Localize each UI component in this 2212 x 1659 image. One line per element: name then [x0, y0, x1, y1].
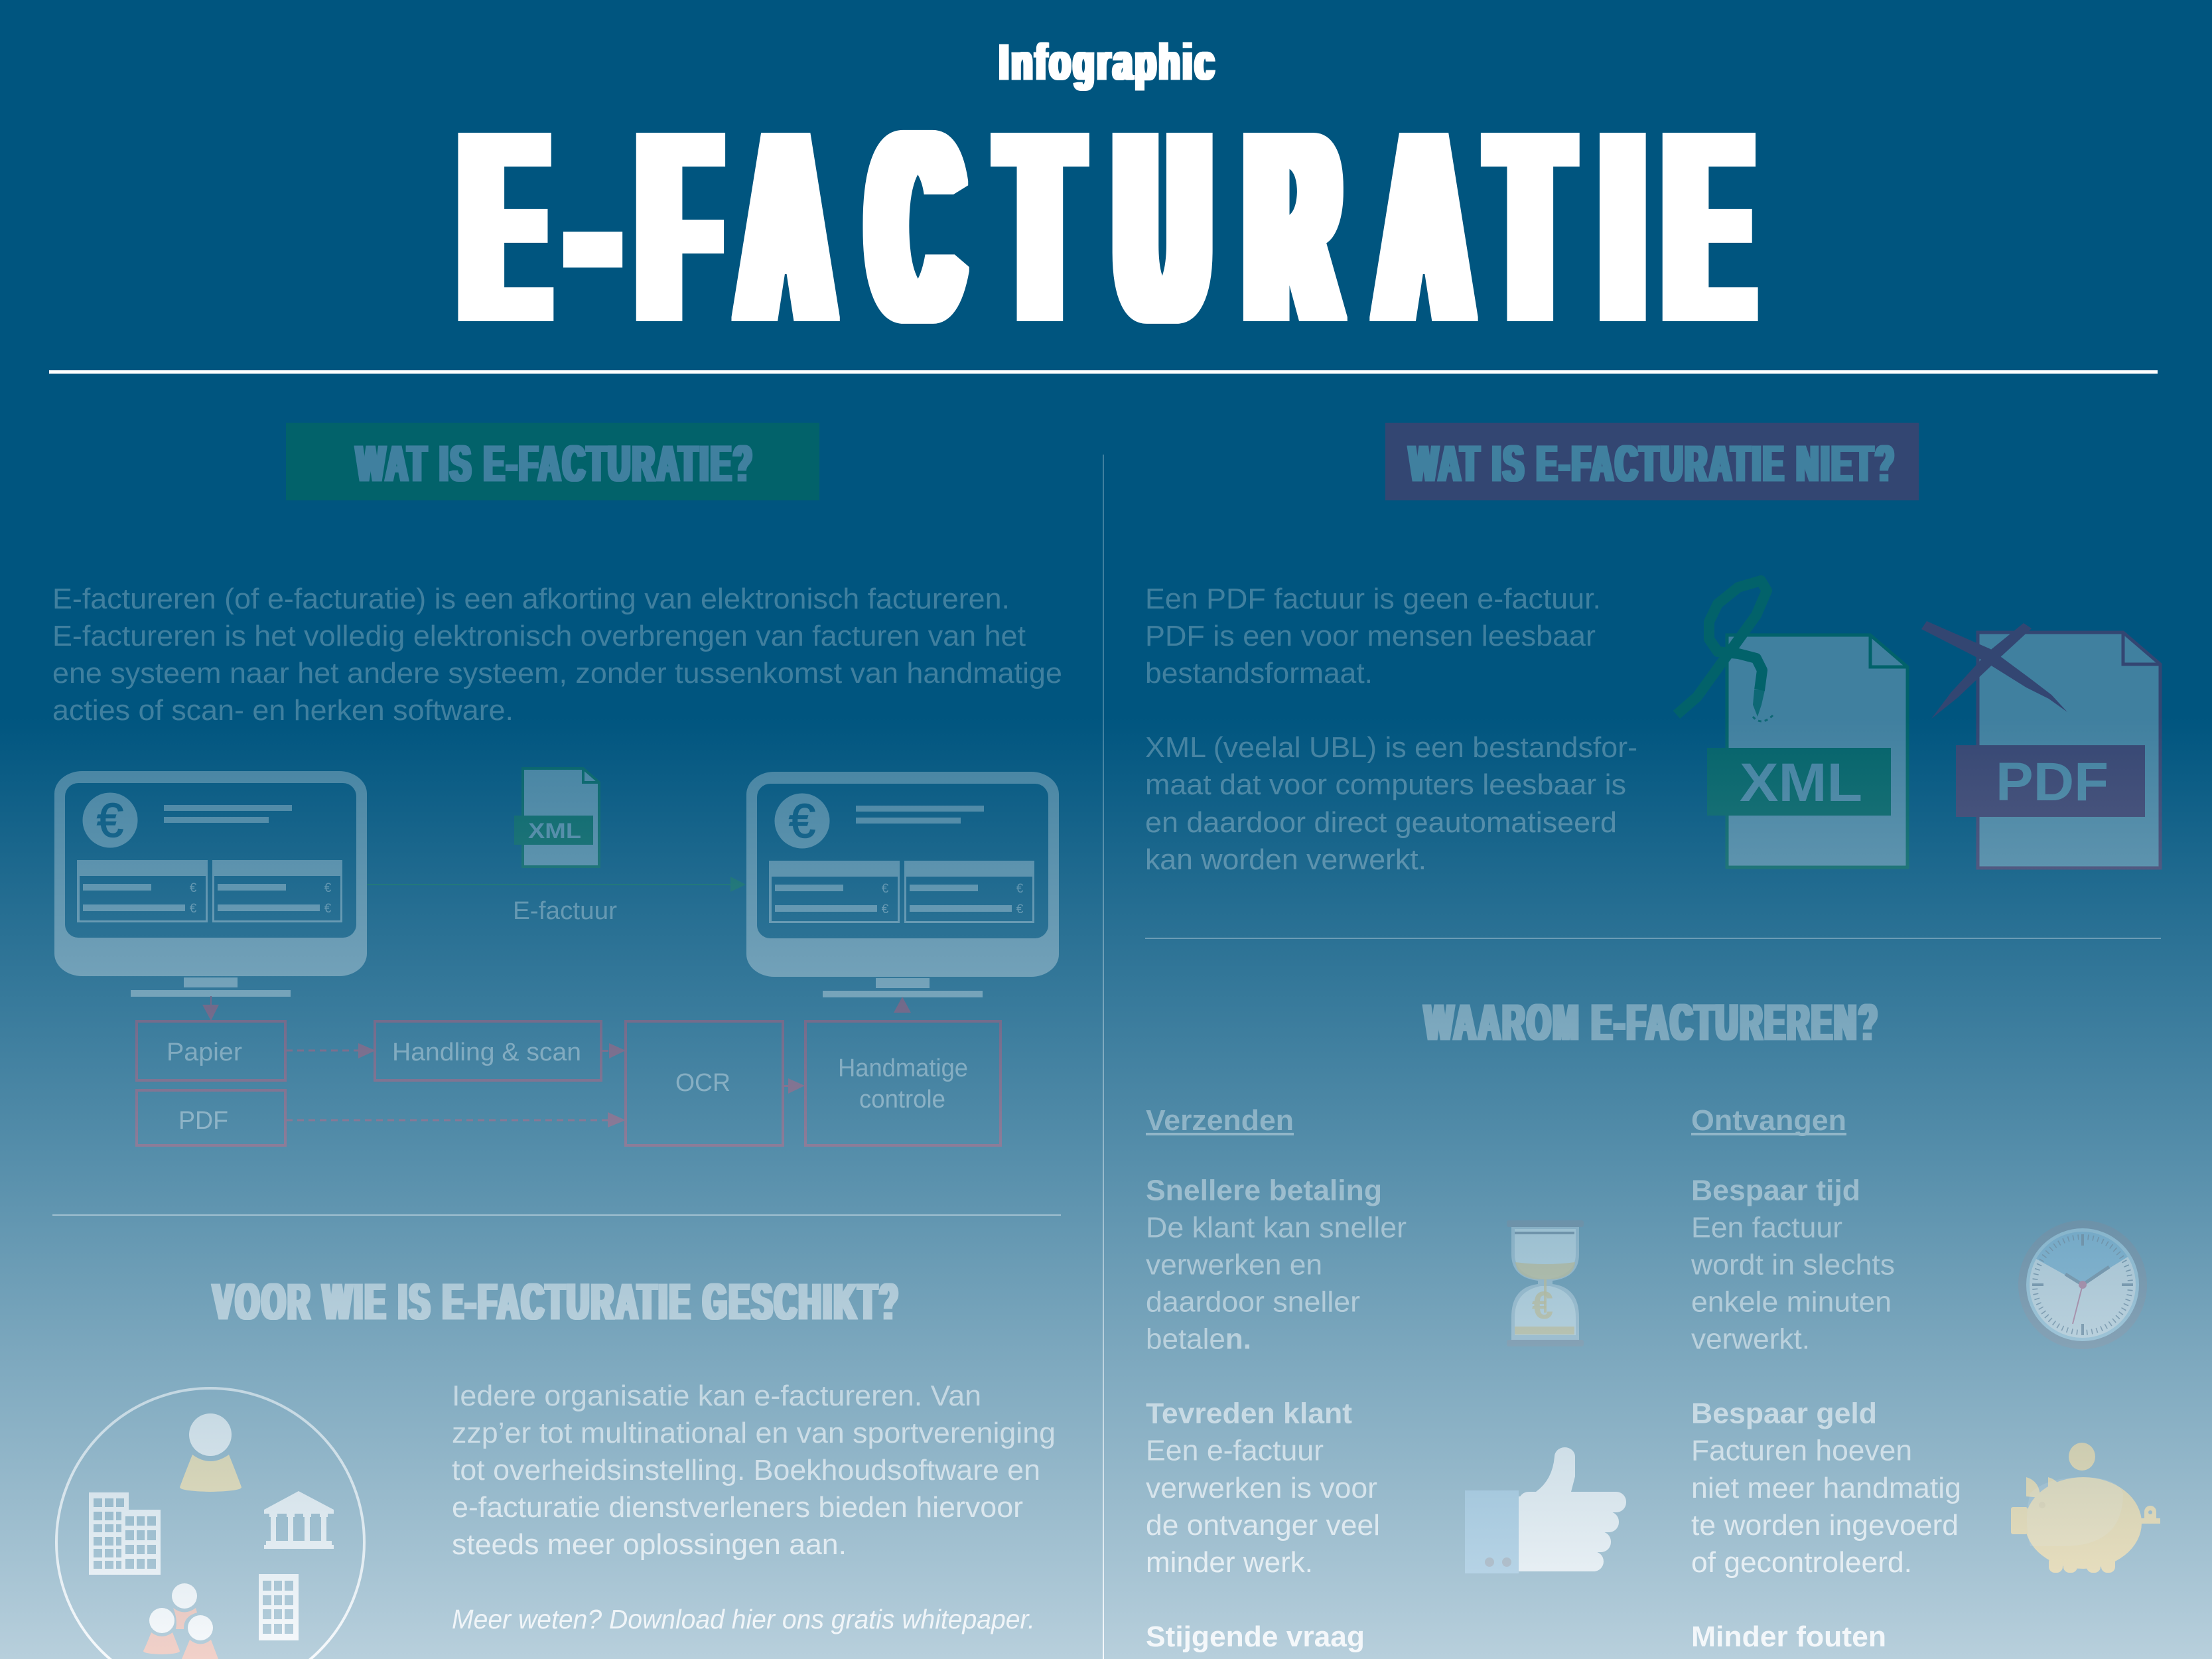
- icon: xml file with check scribble: [1677, 581, 1907, 867]
- text block: voor wie: steeds meer oplossingen aan.: [452, 1528, 847, 1561]
- box: ocr: OCR: [675, 1069, 730, 1097]
- icon: tall building: [259, 1574, 299, 1640]
- diagram: e-factuur flow: [54, 768, 1059, 1145]
- icon: left monitor: €: [97, 794, 123, 847]
- panel: wat is e-facturatie: [52, 423, 1062, 1145]
- text: whitepaper link: Meer weten? Download hier ons gratis whitepaper.: [452, 1604, 1035, 1634]
- icon: group of people: [143, 1583, 218, 1659]
- panel: voor wie geschikt: [56, 1273, 1056, 1659]
- arrows: manual flow: [202, 996, 911, 1127]
- text block: pdf versus xml: kan worden verwerkt.: [1145, 843, 1426, 876]
- icon: left monitor: €: [324, 902, 332, 916]
- item: bespaar geld: of gecontroleerd.: [1691, 1546, 1912, 1579]
- item: stijgende vraag: Stijgende vraag: [1146, 1621, 1365, 1653]
- text block: pdf versus xml: maat dat voor computers leesbaar is: [1145, 768, 1626, 801]
- item: bespaar geld: Bespaar geld: [1691, 1398, 1877, 1429]
- icon: left monitor: [54, 771, 367, 997]
- icon: person: [180, 1413, 242, 1492]
- text block: voor wie: e-facturatie dienstverleners bieden hiervoor: [452, 1491, 1023, 1524]
- item: snellere betaling: verwerken en: [1146, 1249, 1322, 1281]
- item: tevreden klant: minder werk.: [1146, 1546, 1313, 1579]
- text block: voor wie: tot overheidsinstelling. Boekhoudsoftware en: [452, 1454, 1040, 1486]
- item: tevreden klant: verwerken is voor: [1146, 1472, 1377, 1504]
- item: bespaar tijd: verwerkt.: [1691, 1323, 1810, 1355]
- item: bespaar geld: [1691, 1398, 1961, 1579]
- icon: pdf file with cross: PDF: [1996, 752, 2108, 812]
- item: minder fouten: Minder fouten: [1691, 1621, 1886, 1653]
- text block: definition: acties of scan- en herken software.: [52, 694, 514, 727]
- heading: wat is het niet: [1385, 423, 1919, 500]
- item: tevreden klant: Tevreden klant: [1146, 1398, 1352, 1429]
- icon: left monitor: €: [190, 902, 197, 916]
- divider left: [52, 1214, 1061, 1216]
- icon: pdf file with cross: [1921, 621, 2160, 868]
- item: tevreden klant: [1146, 1398, 1380, 1579]
- icon: right monitor: [746, 772, 1059, 997]
- icon: government building: [264, 1491, 334, 1549]
- text block: definition: E-factureren (of e-facturatie) is een afkorting van elektronisch factureren.: [52, 583, 1010, 615]
- icon: clock: [2018, 1220, 2147, 1349]
- item: bespaar tijd: [1691, 1175, 1895, 1355]
- icon: thumbs up: [1465, 1447, 1626, 1573]
- item: snellere betaling: daardoor sneller: [1146, 1286, 1360, 1318]
- text block: voor wie: zzp’er tot multinational en van sportvereniging: [452, 1417, 1056, 1449]
- item: bespaar geld: te worden ingevoerd: [1691, 1509, 1959, 1542]
- subheading: ontvangen: Ontvangen: [1691, 1104, 1846, 1137]
- box: handmatige controle: [805, 1021, 1001, 1145]
- icon: hourglass: [1507, 1220, 1584, 1346]
- column: verzenden: [1146, 1104, 1407, 1653]
- heading: waarom: WAAROM E-FACTUREREN?: [1424, 994, 1880, 1051]
- text block: voor wie: Iedere organisatie kan e-factureren. Van: [452, 1380, 981, 1412]
- icon: xml file with check scribble: XML: [1740, 753, 1862, 813]
- icon: small XML file: [514, 768, 599, 867]
- box: handling en scan: [375, 1021, 601, 1080]
- item: bespaar tijd: Een factuur: [1691, 1212, 1842, 1244]
- box: handmatige controle: Handmatige: [838, 1054, 968, 1082]
- heading: wat is e-facturatie: WAT IS E-FACTURATIE?: [356, 435, 754, 492]
- text block: pdf versus xml: Een PDF factuur is geen e-factuur.: [1145, 583, 1601, 615]
- icon: organisations circle: [56, 1388, 364, 1659]
- item: bespaar tijd: enkele minuten: [1691, 1286, 1892, 1318]
- text block: pdf versus xml: PDF is een voor mensen leesbaar: [1145, 620, 1596, 652]
- item: tevreden klant: de ontvanger veel: [1146, 1509, 1380, 1542]
- box: pdf: [137, 1090, 285, 1145]
- item: snellere betaling: De klant kan sneller: [1146, 1212, 1407, 1244]
- vertical divider: [1103, 455, 1104, 1659]
- arrow: e-factuur: [367, 877, 746, 892]
- icon: left monitor: €: [324, 881, 332, 895]
- item: bespaar tijd: Bespaar tijd: [1691, 1175, 1860, 1206]
- box: ocr: [626, 1021, 783, 1145]
- subheading: verzenden: Verzenden: [1146, 1104, 1294, 1137]
- item: bespaar geld: niet meer handmatig: [1691, 1472, 1961, 1504]
- box: handling en scan: Handling & scan: [392, 1039, 581, 1066]
- icon: right monitor: €: [882, 902, 889, 916]
- text block: pdf versus xml: bestandsformaat.: [1145, 657, 1373, 689]
- label: e-factuur: E-factuur: [513, 897, 617, 925]
- text block: definition: ene systeem naar het andere systeem, zonder tussenkomst van handmatige: [52, 657, 1062, 689]
- heading: wat is e-facturatie: [286, 423, 819, 500]
- text block: pdf versus xml: [1145, 583, 1637, 876]
- heading: voor wie: VOOR WIE IS E-FACTURATIE GESCHIKT?: [213, 1273, 900, 1331]
- icon: office buildings: [89, 1492, 161, 1575]
- box: pdf: PDF: [178, 1107, 228, 1135]
- item: snellere betaling: betalen.: [1146, 1323, 1251, 1355]
- item: snellere betaling: Snellere betaling: [1146, 1175, 1382, 1206]
- item: snellere betaling: [1146, 1175, 1407, 1355]
- text block: definition: [52, 583, 1062, 727]
- icon: right monitor: €: [789, 795, 815, 848]
- item: tevreden klant: Een e-factuur: [1146, 1435, 1324, 1467]
- icon: hourglass: €: [1532, 1284, 1553, 1327]
- icon: left monitor: €: [190, 881, 197, 895]
- text block: voor wie: [452, 1380, 1056, 1561]
- text block: definition: E-factureren is het volledig elektronisch overbrengen van facturen van het: [52, 620, 1026, 652]
- icon: small XML file: XML: [528, 819, 581, 843]
- text block: pdf versus xml: en daardoor direct geautomatiseerd: [1145, 806, 1617, 839]
- box: handmatige controle: controle: [859, 1086, 945, 1114]
- panel: wat is e-facturatie niet: [1145, 423, 2160, 876]
- icon: right monitor: €: [1016, 902, 1024, 916]
- icon: piggy bank: [2011, 1443, 2160, 1573]
- heading: wat is het niet: WAT IS E-FACTURATIE NIET?: [1409, 435, 1896, 492]
- panel: waarom e-factureren: [1146, 994, 2160, 1653]
- item: bespaar tijd: wordt in slechts: [1691, 1249, 1895, 1281]
- header rule: [49, 370, 2158, 374]
- column: ontvangen: [1691, 1104, 1961, 1653]
- header: kicker: Infographic: [999, 34, 1217, 91]
- box: papier: Papier: [167, 1039, 242, 1066]
- item: bespaar geld: Facturen hoeven: [1691, 1435, 1912, 1467]
- box: papier: [137, 1021, 285, 1080]
- icon: right monitor: €: [1016, 882, 1024, 896]
- text block: pdf versus xml: XML (veelal UBL) is een bestandsfor-: [1145, 731, 1637, 764]
- header: title: E-FACTURATIE: [465, 77, 1748, 377]
- icon: right monitor: €: [882, 882, 889, 896]
- divider right: [1145, 938, 2161, 939]
